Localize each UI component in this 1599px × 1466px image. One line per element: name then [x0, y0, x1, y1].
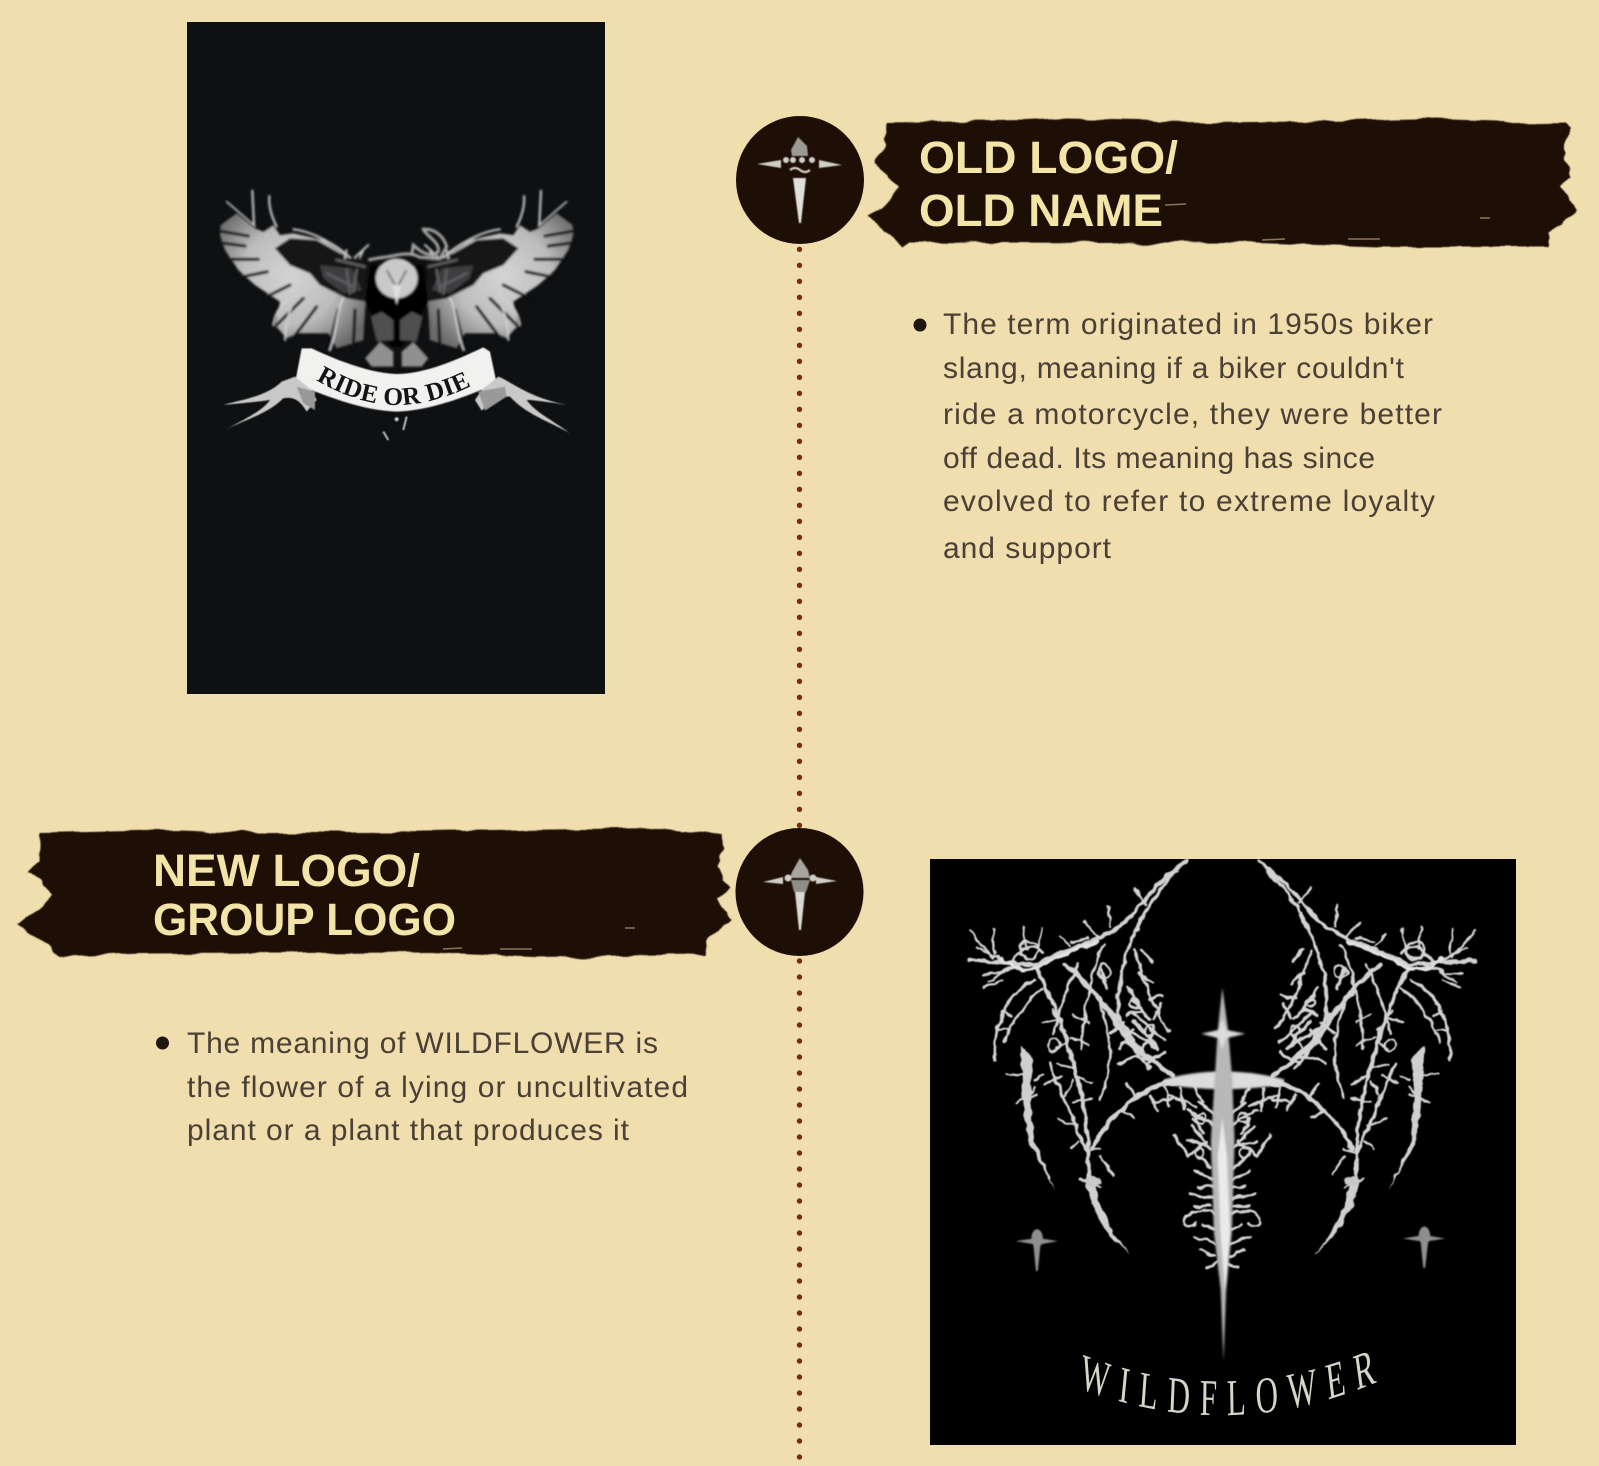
bullet list: new logo: the flower of a lying or uncultivated: [187, 1071, 688, 1104]
ribbon banner: [224, 346, 570, 441]
old logo image: eagle with Ride or Die banner: [187, 22, 605, 694]
bullet list: old logo: ride a motorcycle, they were better: [943, 398, 1442, 431]
heading banner: new logo / group logo: [18, 828, 732, 957]
bullet list: new logo: The meaning of WILDFLOWER is: [187, 1027, 658, 1060]
heading text: GROUP LOGO: [153, 894, 456, 945]
text: Wildflower wordmark: [1082, 1352, 1377, 1416]
small side crosses: [1016, 1227, 1445, 1271]
bullet list: old logo: slang, meaning if a biker couldn't: [943, 352, 1405, 385]
bullet list: new logo: [156, 1027, 688, 1147]
connector icon circle: old logo: [736, 116, 864, 244]
bullet list: old logo: [914, 308, 1442, 565]
bullet list: old logo: evolved to refer to extreme loyalty: [943, 485, 1435, 518]
timeline dotted line: [797, 249, 802, 1466]
bullet list: old logo: off dead. Its meaning has since: [943, 442, 1375, 475]
bullet list: old logo: and support: [943, 532, 1112, 565]
text: Ride or Die: RIDE OR DIE: [316, 366, 470, 406]
heading text: OLD LOGO/: [919, 132, 1178, 183]
heading text: NEW LOGO/: [153, 845, 420, 896]
heading text: OLD NAME: [919, 185, 1163, 236]
heading banner: old logo / old name: [867, 118, 1578, 247]
bullet list: old logo: The term originated in 1950s biker: [943, 308, 1433, 341]
connector icon circle: new logo: [736, 828, 864, 956]
bullet list: new logo: plant or a plant that produces it: [187, 1114, 630, 1147]
new logo image: thorned cross with Wildflower wordmark: [930, 858, 1516, 1445]
text: Wildflower wordmark: WILDFLOWER: [1082, 1352, 1377, 1416]
